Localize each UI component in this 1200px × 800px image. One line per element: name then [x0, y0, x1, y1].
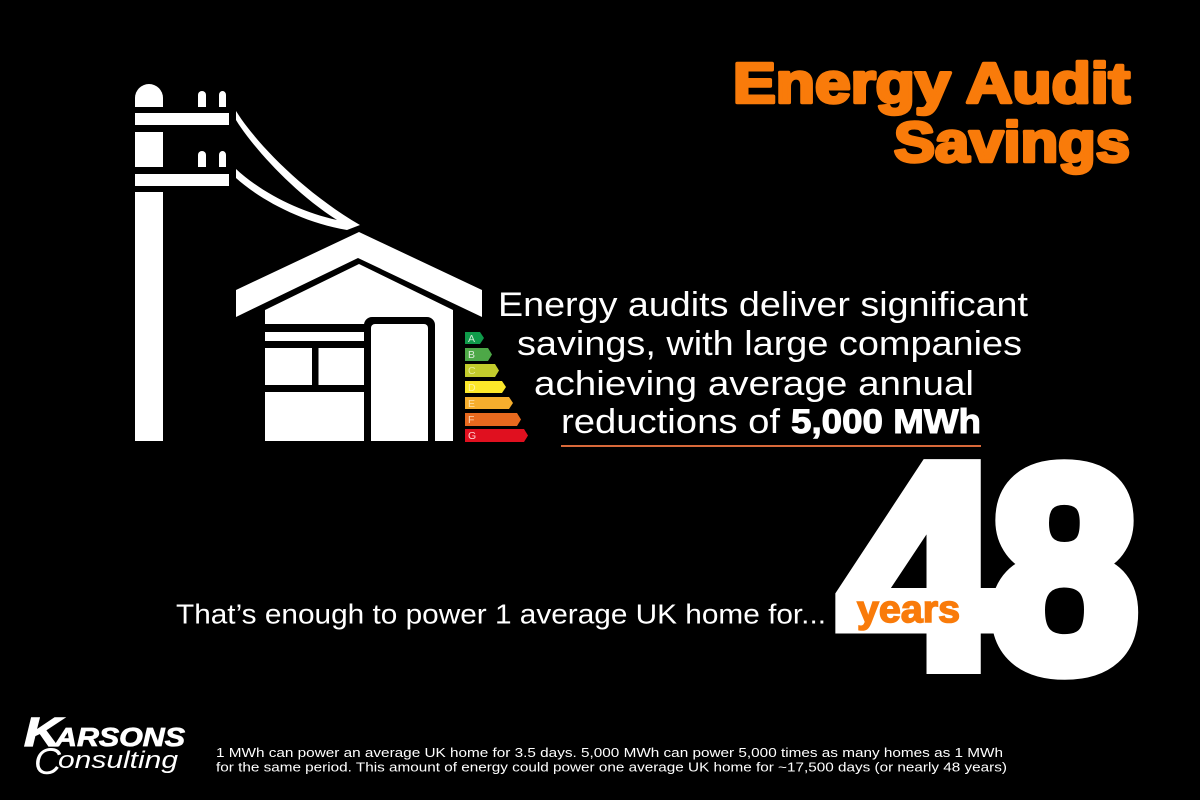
title [733, 52, 1130, 174]
intro text [498, 286, 1029, 441]
intro text: 5,000 MWh [791, 403, 981, 441]
energy rating scale: D [468, 382, 476, 394]
footnote: for the same period. This amount of energy could power one average UK home for ~17,500 days (or nearly 48 years) [216, 760, 1007, 774]
energy rating scale: G [468, 430, 476, 442]
title: Savings [894, 110, 1130, 174]
logo [24, 709, 186, 782]
intro text: Energy audits deliver significant [498, 286, 1029, 324]
logo: K [24, 709, 65, 755]
big number 48: 8 [991, 409, 1138, 729]
house window [265, 324, 365, 392]
house roof [236, 232, 482, 317]
big number 48 [839, 405, 1138, 729]
underline [561, 445, 981, 447]
logo: onsulting [58, 747, 179, 774]
icon: power lines [236, 111, 360, 230]
intro text: achieving average annual [534, 365, 974, 403]
years label: years [857, 589, 960, 631]
logo: C [34, 741, 61, 782]
energy rating scale: E [468, 398, 475, 410]
big number 48: 4 [839, 405, 1003, 728]
house body [265, 264, 453, 441]
energy rating scale [465, 332, 528, 442]
icon: house [236, 232, 482, 441]
energy rating scale: B [468, 349, 475, 361]
logo: ARSONS [54, 722, 186, 752]
energy rating scale: A [468, 333, 475, 345]
icon: utility pole [135, 84, 229, 441]
energy rating scale: F [468, 414, 474, 426]
house door [364, 317, 435, 441]
power statement: That’s enough to power 1 average UK home for... [176, 598, 826, 630]
title: Energy Audit [733, 52, 1130, 116]
footnote: 1 MWh can power an average UK home for 3.5 days. 5,000 MWh can power 5,000 times as many homes as 1 MWh [216, 745, 1003, 760]
intro text: savings, with large companies [517, 325, 1022, 363]
intro text: reductions of [561, 403, 781, 441]
energy rating scale: C [468, 365, 476, 377]
footnote [216, 745, 1007, 774]
